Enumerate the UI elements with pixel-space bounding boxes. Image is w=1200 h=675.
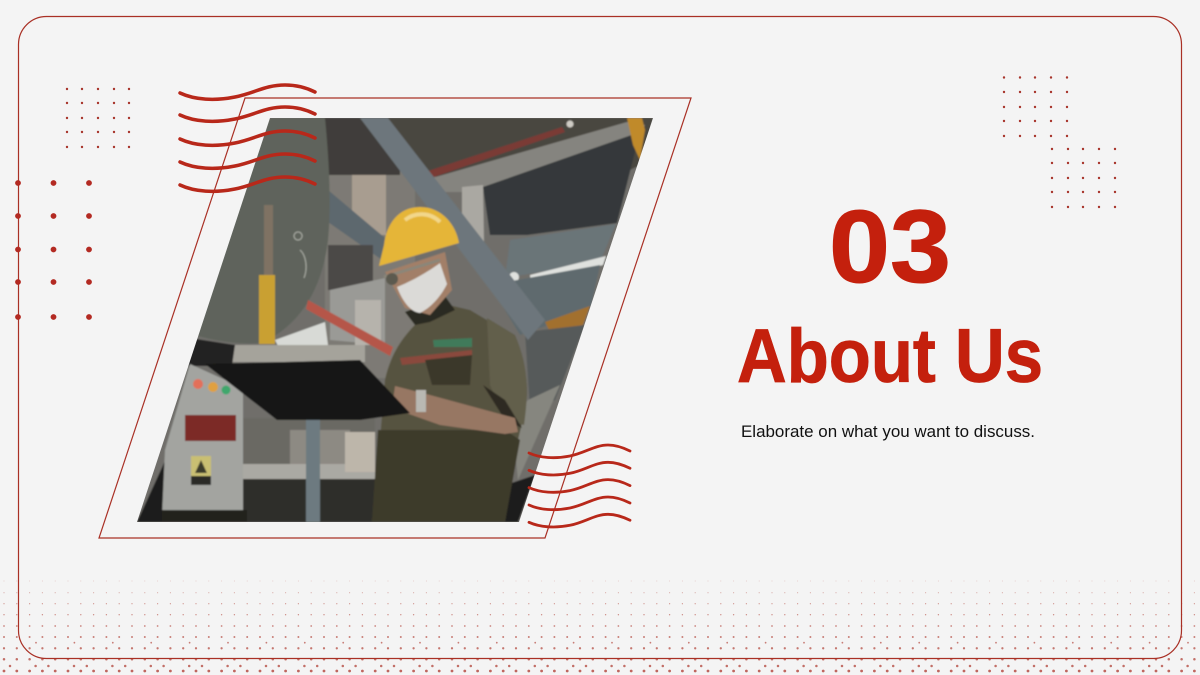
clipboard post — [306, 398, 320, 522]
heading: About Us — [737, 314, 1043, 399]
control box — [137, 364, 247, 522]
ceiling and steel structure — [360, 118, 653, 522]
thin parallelogram outline — [99, 98, 691, 538]
wavy lines: bottom right of photo — [529, 445, 630, 527]
worker — [372, 207, 527, 522]
section number: 03 — [829, 189, 951, 304]
subtitle: Elaborate on what you want to discuss. — [741, 422, 1035, 441]
boiler vessel — [195, 118, 330, 344]
dot grid: upper right, first block — [1003, 76, 1068, 137]
red beam — [306, 300, 393, 356]
photo: factory worker with tablet, parallelogram crop — [130, 110, 660, 530]
building interior left of worker — [325, 118, 415, 378]
wavy lines: top left of photo — [180, 85, 315, 191]
dot grid: left large — [15, 180, 92, 320]
halftone dot band along the bottom — [4, 581, 1200, 671]
dot grid: upper right, second block — [1051, 148, 1116, 208]
dot grid: upper left small — [66, 88, 130, 148]
clipboard — [205, 360, 410, 420]
machine lower background — [242, 430, 376, 522]
